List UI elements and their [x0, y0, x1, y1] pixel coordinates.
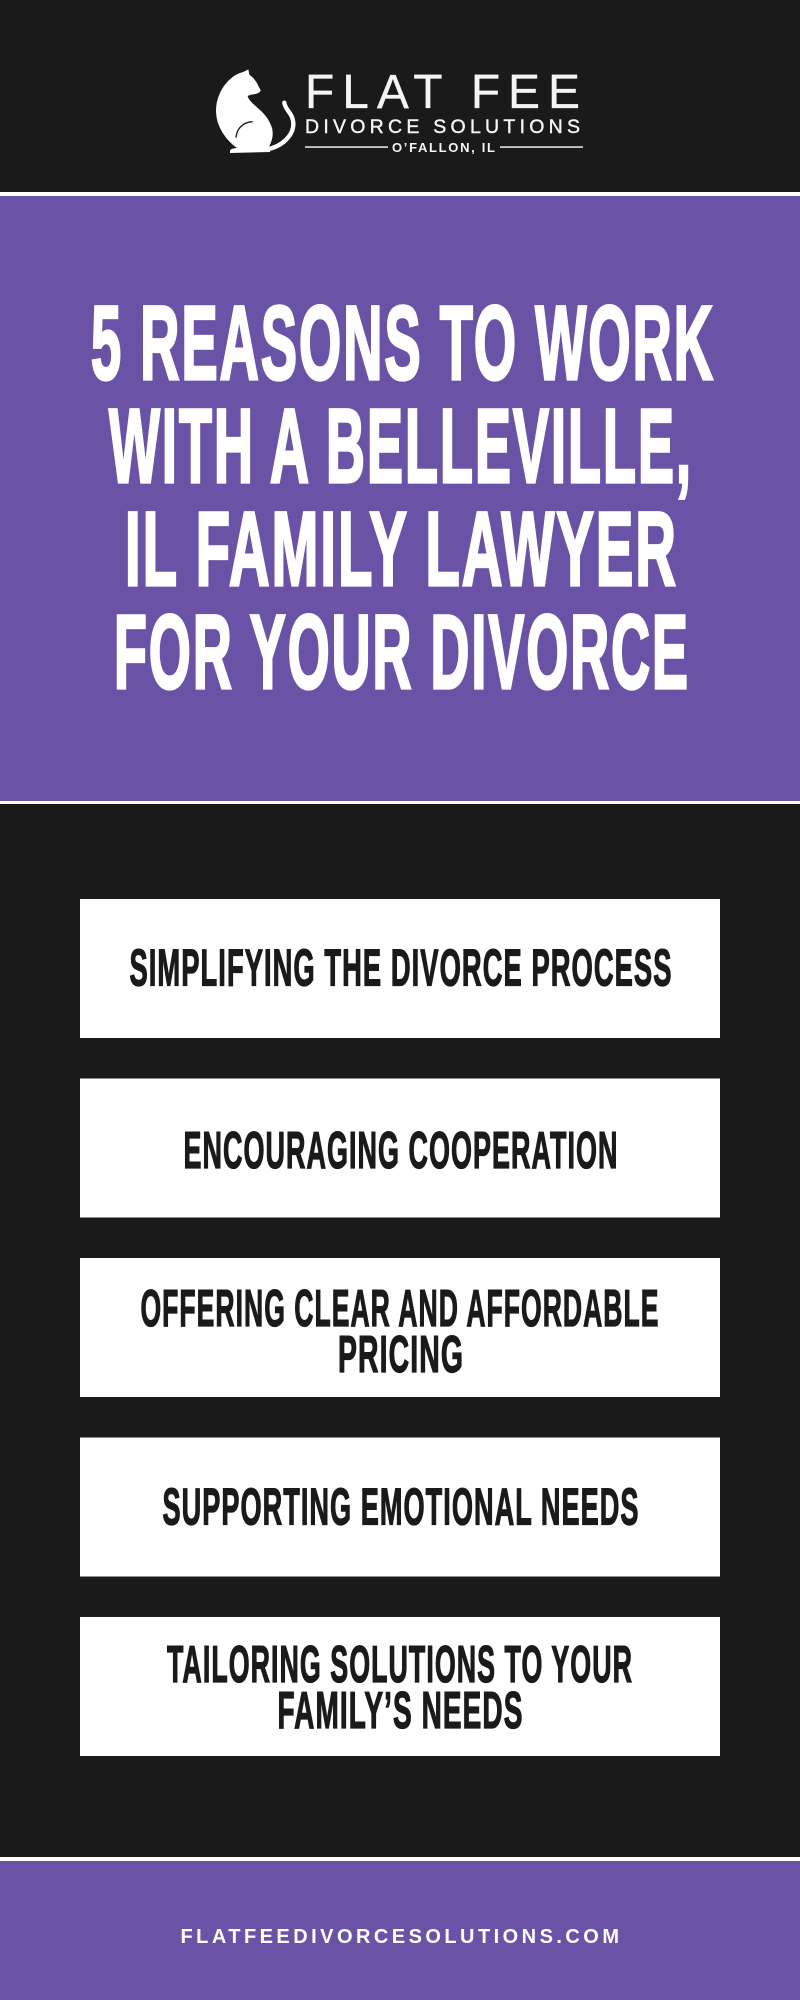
card: offering clear and affordable pricing — [80, 1258, 720, 1397]
card: supporting emotional needs — [80, 1438, 720, 1576]
card: offering clear and affordable pricing: PRICING — [338, 1326, 464, 1384]
card: encouraging cooperation — [80, 1078, 720, 1218]
card: tailoring solutions to your family's needs — [80, 1617, 720, 1756]
icon: sitting cat — [216, 69, 293, 153]
logo location: O'FALLON, IL: O’FALLON, IL — [392, 140, 495, 155]
panel: purple title band — [0, 192, 800, 804]
panel: purple footer band — [0, 1857, 800, 2000]
logo: Flat Fee Divorce Solutions — [216, 66, 583, 155]
footer website address: FLATFEEDIVORCESOLUTIONS.COM — [180, 1926, 619, 1948]
logo wordmark: FLAT FEE: FLAT FEE — [305, 66, 580, 119]
card: simplifying the divorce process — [80, 899, 720, 1038]
title — [91, 285, 715, 711]
card: tailoring solutions to your family's needs: FAMILY’S NEEDS — [278, 1682, 524, 1740]
logo subtitle: DIVORCE SOLUTIONS: DIVORCE SOLUTIONS — [305, 116, 580, 138]
